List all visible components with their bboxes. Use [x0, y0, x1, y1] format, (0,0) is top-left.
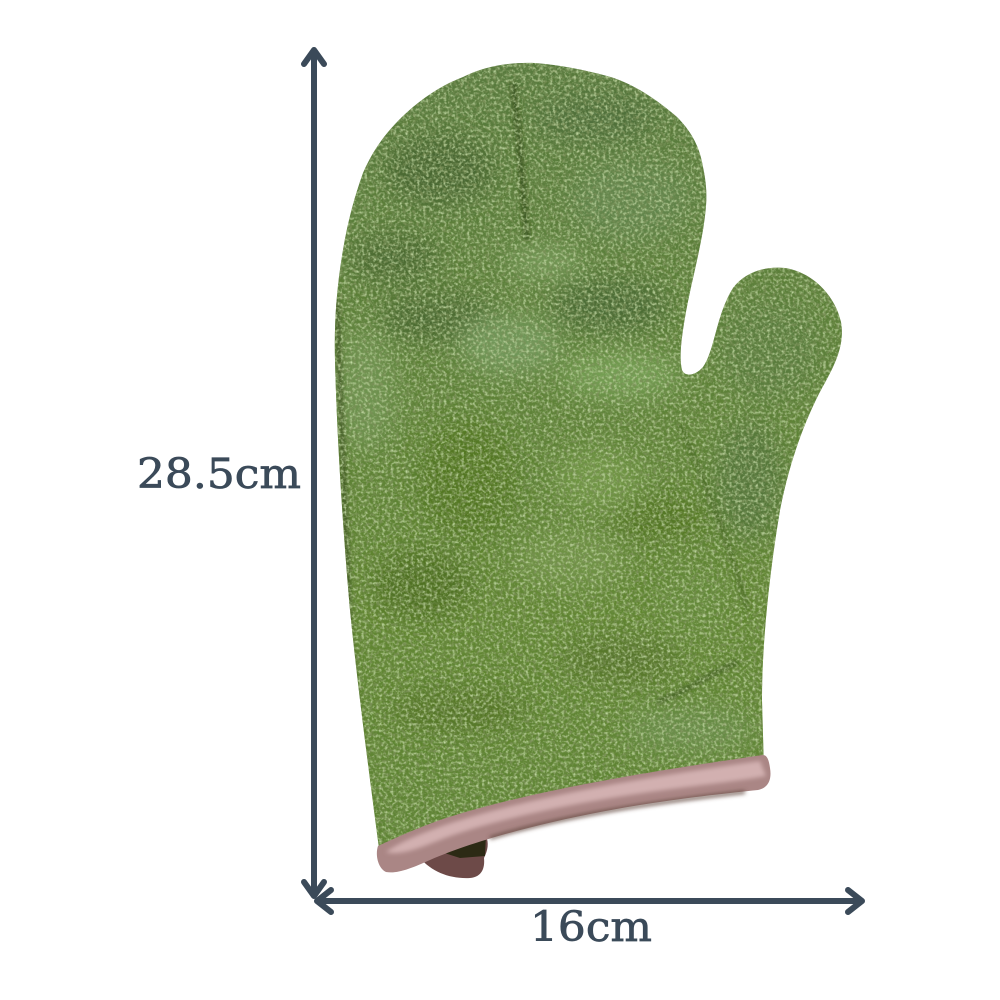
label: width 16cm: 16cm: [530, 903, 652, 951]
infographic: mitt with dimensions: [140, 47, 865, 942]
mitt terry texture: [320, 50, 860, 860]
image: green terry mitt: [320, 50, 860, 878]
label: height 28.5cm: 28.5cm: [137, 450, 301, 498]
mitt terry highlights: [320, 50, 860, 860]
shading patches: [335, 93, 820, 752]
mitt fold lines: [337, 83, 748, 840]
arrow: width dimension: [317, 890, 862, 912]
pink cuff binding: [377, 755, 770, 872]
mitt body: [320, 50, 860, 860]
arrow: height dimension: [304, 50, 324, 896]
mitt loop: [420, 834, 488, 878]
